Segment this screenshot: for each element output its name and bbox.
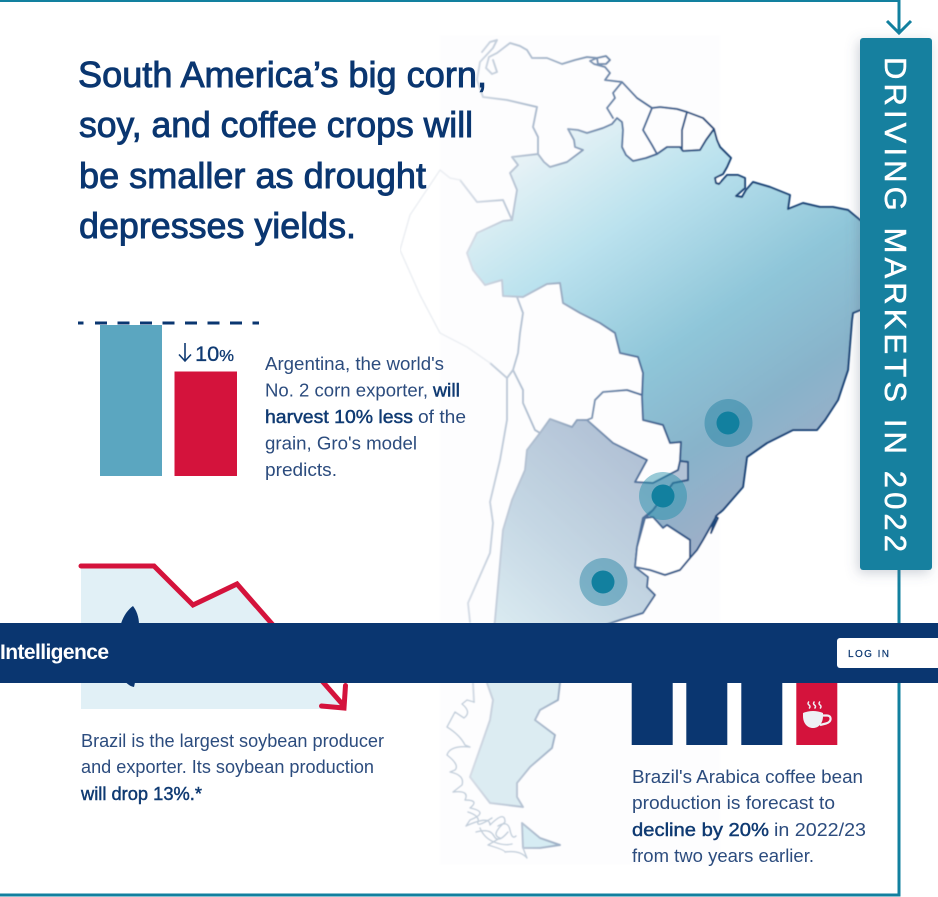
trend arrow — [81, 566, 346, 708]
brand name: Intelligence — [0, 641, 109, 664]
text: Brazil coffee: decline by 20% — [632, 819, 769, 840]
map: Brazil — [467, 118, 885, 558]
text: Brazil soybeans: Brazil is the largest soybean producer — [81, 730, 384, 751]
panel heading: DRIVING MARKETS IN 2022 — [878, 57, 913, 552]
text: Argentina: Argentina, the world's — [265, 353, 444, 374]
icon: down arrow — [179, 343, 191, 361]
text: Argentina: of the — [418, 406, 466, 427]
navigation bar — [0, 623, 938, 683]
log in button — [837, 638, 938, 668]
text: Brazil coffee — [632, 766, 866, 866]
text: Brazil soybeans — [80, 730, 384, 804]
text: Brazil soybeans: and exporter. Its soybean production — [81, 756, 374, 777]
text: Brazil coffee: in 2022/23 — [774, 819, 866, 840]
map: southern islands — [447, 700, 527, 858]
label: minus 10 percent: 10% — [195, 343, 234, 366]
map: South America — [400, 35, 885, 865]
title — [78, 54, 487, 246]
title: South America’s big corn, — [78, 54, 487, 95]
text: Argentina: harvest 10% less — [265, 406, 413, 427]
map markers — [580, 399, 752, 606]
map: faint western coast — [400, 170, 490, 363]
icon: coffee cup — [803, 702, 831, 728]
map: Argentina — [470, 419, 688, 807]
text: Brazil coffee: Brazil's Arabica coffee bean — [632, 766, 863, 787]
text: Brazil coffee: production is forecast to — [632, 792, 835, 813]
title: soy, and coffee crops will — [79, 104, 473, 145]
side panel — [860, 38, 932, 570]
text: Argentina: grain, Gro's model — [265, 432, 417, 454]
text: Argentina: predicts. — [265, 459, 337, 480]
text: Brazil coffee: from two years earlier. — [632, 845, 814, 866]
bar chart: Argentina corn — [78, 323, 259, 476]
text: Argentina: will — [432, 380, 460, 400]
text: Argentina: No. 2 corn exporter, — [265, 380, 428, 400]
log in button: LOG IN — [848, 649, 889, 660]
title: be smaller as drought — [79, 155, 426, 196]
map: Tierra del Fuego — [522, 823, 560, 848]
text: Argentina — [265, 353, 466, 480]
title: depresses yields. — [79, 205, 356, 246]
map: neighbouring country borders — [460, 40, 714, 702]
map: Uruguay — [635, 517, 690, 575]
bar chart: coffee — [632, 670, 837, 745]
text: Brazil soybeans: will drop 13%.* — [80, 783, 202, 804]
icon: soybean leaf — [118, 606, 139, 687]
area chart: Brazil soybeans — [81, 566, 346, 709]
